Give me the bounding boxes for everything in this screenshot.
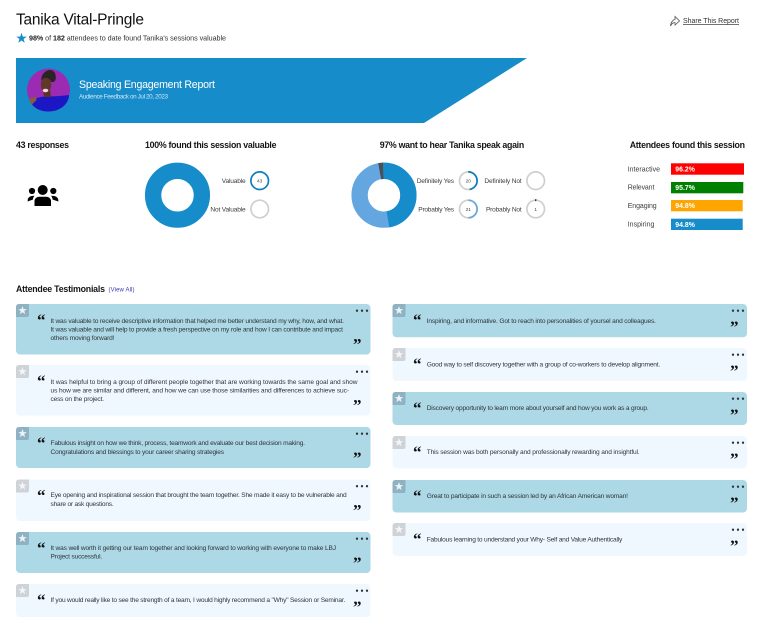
rating: relevant: Relevant bbox=[628, 185, 654, 192]
legend: definitely not: Definitely Not bbox=[484, 178, 522, 185]
legend: valuable: 43 bbox=[257, 178, 263, 184]
panel: hear again bbox=[360, 140, 544, 220]
legend: definitely yes bbox=[417, 172, 477, 190]
rating: inspiring: 94.8% bbox=[675, 222, 695, 229]
rating: engaging: Engaging bbox=[628, 203, 657, 210]
testimonial card 9: “ bbox=[413, 398, 422, 418]
testimonial card 4 bbox=[16, 480, 370, 521]
legend: probably not: Probably Not bbox=[486, 206, 522, 213]
testimonial card 12: Fabulous learning to understand your Why- Self and Value Authentically bbox=[427, 536, 623, 544]
view all link: (View All) bbox=[108, 287, 134, 293]
testimonial card 5: ” bbox=[353, 553, 362, 572]
banner heading: Speaking Engagement Report bbox=[79, 79, 215, 91]
donut chart: hear again bbox=[360, 171, 408, 220]
legend: probably not bbox=[486, 200, 544, 218]
testimonial card 9: ” bbox=[730, 406, 738, 425]
legend: probably yes bbox=[418, 200, 477, 218]
legend: valuable: Valuable bbox=[222, 178, 246, 185]
icon: share arrow bbox=[670, 16, 680, 26]
share link bbox=[670, 16, 739, 26]
icon: group of people bbox=[28, 185, 58, 206]
testimonial card 3: Congratulations and blessings to your career sharing strategies bbox=[50, 449, 225, 456]
legend: definitely yes: Definitely Yes bbox=[417, 178, 455, 185]
testimonial card 8 bbox=[392, 348, 747, 381]
testimonial card 3: ” bbox=[353, 449, 362, 468]
testimonial card 5 bbox=[16, 532, 370, 573]
testimonial card 10: “ bbox=[413, 442, 422, 462]
testimonial card 2: It was helpful to bring a group of different people together that are working towards the same goal and show bbox=[50, 379, 358, 386]
testimonial card 6: “ bbox=[37, 590, 46, 610]
testimonial card 10: ” bbox=[730, 450, 738, 469]
banner bbox=[16, 58, 527, 123]
legend: probably not: 1 bbox=[534, 207, 537, 213]
legend: not valuable: Not Valuable bbox=[210, 206, 246, 213]
testimonials heading: Attendee Testimonials bbox=[16, 284, 105, 294]
ratings heading: Attendees found this session bbox=[630, 140, 745, 150]
testimonial card 12: “ bbox=[413, 530, 422, 548]
share text: Share This Report bbox=[683, 18, 739, 25]
testimonial card 7: ” bbox=[730, 318, 738, 337]
testimonial card 6: ” bbox=[353, 598, 362, 617]
testimonial card 10 bbox=[392, 436, 747, 469]
legend: definitely not bbox=[484, 172, 544, 190]
panel: attendee ratings bbox=[628, 140, 745, 230]
testimonial card 4: Eye opening and inspirational session that brought the team together. She made it easy to be vulnerable and bbox=[50, 492, 347, 499]
testimonial card 8: “ bbox=[413, 354, 422, 374]
rating: interactive: Interactive bbox=[628, 166, 660, 173]
rating: inspiring bbox=[628, 219, 743, 230]
icon: blue star bbox=[16, 33, 27, 43]
testimonial card 5: Project successful. bbox=[50, 554, 102, 560]
testimonial card 9: Discovery opportunity to learn more about yourself and how you work as a group. bbox=[427, 405, 649, 412]
testimonial card 4: ” bbox=[353, 501, 362, 520]
legend: probably yes: Probably Yes bbox=[418, 206, 455, 213]
legend: valuable bbox=[222, 172, 268, 190]
testimonial card 9 bbox=[392, 392, 747, 425]
testimonial card 2: cess on the project. bbox=[50, 396, 104, 403]
testimonial card 1 bbox=[16, 304, 370, 354]
testimonial card 10: This session was both personally and professionally rewarding and insightful. bbox=[427, 449, 640, 456]
testimonial card 2: “ bbox=[37, 372, 46, 390]
testimonial card 2: us how we are similar and different, and how we can use those similarities and differences to achieve suc- bbox=[50, 388, 349, 394]
testimonial card 11 bbox=[392, 480, 747, 513]
valuable heading: 100% found this session valuable bbox=[145, 140, 277, 150]
testimonial card 3: “ bbox=[37, 434, 46, 452]
rating: engaging: 94.8% bbox=[675, 203, 695, 210]
testimonial card 11: ” bbox=[730, 494, 738, 513]
testimonial card 2 bbox=[16, 365, 370, 416]
testimonial card 1: others moving forward! bbox=[50, 335, 115, 342]
testimonial card 12: ” bbox=[730, 537, 738, 556]
panel: responses bbox=[16, 140, 69, 206]
testimonial card 11: “ bbox=[413, 486, 422, 506]
testimonial card 1: It was valuable and will help to provide a fresh perspective on my role and how I can contribute and impact bbox=[50, 327, 343, 334]
testimonial card 1: It was valuable to receive descriptive information that helped me better understand my why, how, and what. bbox=[50, 318, 344, 325]
responses heading: 43 responses bbox=[16, 140, 69, 150]
donut chart: valuable bbox=[153, 171, 202, 220]
legend: probably yes: 21 bbox=[466, 207, 471, 213]
title: Tanika Vital-Pringle bbox=[16, 12, 144, 28]
testimonial card 1: “ bbox=[37, 310, 46, 330]
testimonial card 5: It was well worth it getting our team together and looking forward to working with everyone to make LBJ bbox=[50, 545, 336, 552]
banner date: Audience Feedback on Jul 20, 2023 bbox=[79, 94, 168, 100]
hear again heading: 97% want to hear Tanika speak again bbox=[380, 140, 524, 150]
testimonial card 11: Great to participate in such a session led by an African American woman! bbox=[427, 493, 628, 500]
testimonial card 12 bbox=[392, 523, 747, 556]
testimonial card 2: ” bbox=[353, 396, 362, 415]
rating: relevant: 95.7% bbox=[675, 185, 695, 192]
rating: interactive: 96.2% bbox=[675, 166, 695, 174]
testimonial card 4: share or ask questions. bbox=[50, 501, 114, 508]
testimonial card 8: ” bbox=[730, 362, 738, 381]
testimonial card 7 bbox=[392, 304, 747, 337]
speaker portrait bbox=[27, 68, 70, 112]
rating: interactive bbox=[628, 163, 744, 175]
attendee summary: 98% of 182 attendees to date found Tanika's sessions valuable bbox=[29, 34, 226, 42]
testimonial card 5: “ bbox=[37, 538, 46, 558]
testimonial card 6: If you would really like to see the strength of a team, I would highly recommend a "Why" Session or Seminar. bbox=[50, 597, 345, 604]
rating: inspiring: Inspiring bbox=[628, 221, 654, 228]
rating: engaging bbox=[628, 200, 743, 211]
testimonial card 7: Inspiring, and informative. Got to reach into personalities of yoursel and colleagues. bbox=[427, 318, 656, 325]
legend: definitely yes: 20 bbox=[466, 178, 471, 184]
rating: relevant bbox=[628, 182, 743, 193]
testimonial card 7: “ bbox=[413, 310, 422, 330]
testimonial card 3 bbox=[16, 427, 370, 468]
testimonial card 1: ” bbox=[353, 335, 362, 354]
panel: session valuable bbox=[145, 140, 277, 220]
testimonial card 4: “ bbox=[37, 486, 46, 505]
testimonial card 3: Fabulous insight on how we think, process, teamwork and evaluate our best decision making. bbox=[50, 440, 305, 447]
testimonial card 8: Good way to self discovery together with a group of co-workers to develop alignment. bbox=[427, 362, 660, 368]
testimonial card 6 bbox=[16, 584, 370, 617]
